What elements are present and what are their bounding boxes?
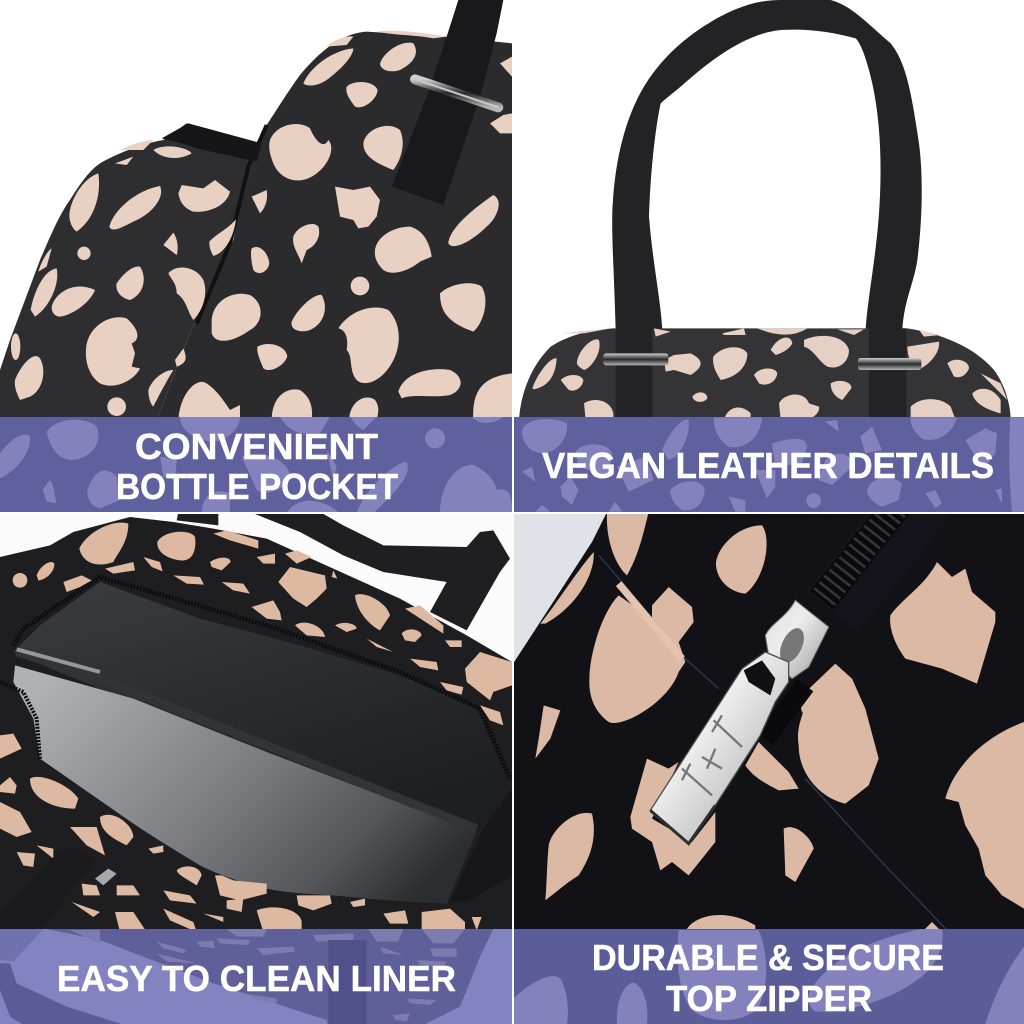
text: EASY TO CLEAN LINER <box>57 958 456 999</box>
shell spots <box>0 523 512 932</box>
zipper slider <box>765 600 829 679</box>
panel: zipper photo <box>514 514 1024 929</box>
zipper tape <box>832 469 945 612</box>
text: line 2: BOTTLE POCKET <box>116 466 398 507</box>
strap buckle <box>95 869 117 885</box>
pocket seam <box>197 125 267 323</box>
text: line 1: CONVENIENT <box>135 426 378 467</box>
banner spots <box>512 929 1024 1024</box>
banner: convenient bottle pocket <box>0 417 512 513</box>
banner: vegan leather details <box>514 417 1024 512</box>
banner: easy to clean liner <box>0 929 512 1024</box>
banner corner shape <box>0 929 43 962</box>
panel: bottle pocket photo <box>0 0 512 420</box>
lower zipper tape <box>765 685 805 739</box>
front zipper line <box>0 682 40 759</box>
panel: liner photo <box>0 512 512 932</box>
banner: durable and secure top zipper <box>512 929 1024 1024</box>
banner bag shape <box>47 929 493 1024</box>
banner spots <box>0 417 512 513</box>
leather strap <box>392 0 503 205</box>
bag outer shell <box>0 517 512 932</box>
leather handles <box>612 0 922 330</box>
bottle pocket <box>0 123 260 420</box>
zipper line <box>13 577 510 779</box>
liner seam <box>17 652 477 829</box>
pocket and body spots <box>11 31 512 420</box>
interior liner upper <box>14 582 481 770</box>
right side strap <box>512 794 513 875</box>
zipper pull <box>650 652 789 844</box>
banner strap shape <box>0 963 130 1024</box>
pull bottom edge <box>650 805 715 844</box>
bag top body <box>519 328 1011 420</box>
fabric background <box>512 512 1024 932</box>
pull opening <box>744 660 775 695</box>
seam stitching <box>599 555 949 932</box>
handle behind bag <box>177 512 510 630</box>
banner strap detail <box>328 940 367 1024</box>
strap base left <box>616 328 652 420</box>
metal slider right <box>858 358 921 370</box>
text: line 1: DURABLE & SECURE <box>592 937 944 978</box>
slider ring <box>780 628 804 662</box>
light corner <box>512 512 607 665</box>
body spots <box>532 328 1007 420</box>
metal slider left <box>603 353 668 365</box>
pull logo <box>682 715 742 795</box>
front strap <box>52 857 54 859</box>
panel: vegan leather photo <box>519 0 1011 420</box>
banner spots <box>70 929 465 1022</box>
strap base right <box>869 328 906 420</box>
zipper coil <box>822 495 905 600</box>
text: line 2: TOP ZIPPER <box>666 978 872 1019</box>
pocket piping <box>619 584 682 659</box>
pocket elastic band <box>162 123 262 162</box>
metal strap slider <box>415 79 498 107</box>
bag main body <box>157 32 512 420</box>
fabric spots <box>535 512 1024 932</box>
text: VEGAN LEATHER DETAILS <box>542 445 994 486</box>
banner spots <box>522 417 1024 512</box>
interior liner lower <box>13 665 477 904</box>
